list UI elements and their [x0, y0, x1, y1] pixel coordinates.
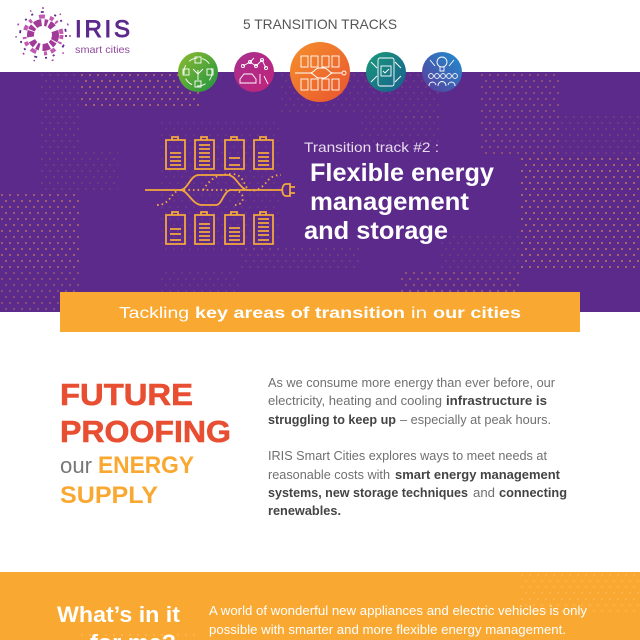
icon: batteries and grid lines [145, 137, 295, 244]
orange banner: our cities [433, 305, 521, 322]
heading: 5 transition tracks: 5 TRANSITION TRACKS [243, 16, 397, 32]
orange banner: in [411, 305, 427, 322]
hero title text [304, 139, 494, 245]
top row of batteries [166, 137, 273, 169]
body text: systems, new storage techniques [268, 486, 468, 500]
body text: IRIS Smart Cities explores ways to meet needs at [268, 449, 548, 463]
body text: connecting [499, 486, 567, 500]
body text: reasonable costs with [268, 468, 390, 482]
logo: IRIS smart cities: IRIS [75, 16, 130, 43]
body text: struggling to keep up [268, 413, 396, 427]
callout question: What’s in it [57, 602, 181, 627]
icon: green track circle [178, 52, 218, 92]
icon: blue track circle [422, 52, 462, 92]
orange banner: key areas of transition [195, 305, 405, 322]
body text: smart energy management [395, 468, 561, 482]
dotted grid lines [157, 174, 281, 205]
headline: future proofing our energy supply: ENERGY [98, 452, 194, 479]
orange banner [60, 292, 580, 332]
plug [280, 184, 295, 196]
body text [268, 376, 567, 518]
hero title text: management [310, 188, 470, 216]
body text: renewables. [268, 504, 341, 518]
hero title text: Transition track #2 : [304, 139, 439, 155]
body text: infrastructure is [446, 394, 547, 408]
headline: future proofing our energy supply: FUTURE [60, 377, 193, 412]
solid grid lines [145, 175, 280, 190]
body text: – especially at peak hours. [400, 413, 551, 427]
headline: future proofing our energy supply: PROOFING [60, 414, 231, 449]
body text: electricity, heating and cooling [268, 394, 442, 408]
icon: magenta track circle [234, 52, 274, 92]
headline: future proofing our energy supply: SUPPLY [60, 482, 158, 509]
body text: As we consume more energy than ever before, our [268, 376, 555, 390]
body text: and [473, 486, 495, 500]
bottom orange panel [0, 572, 640, 640]
hero title text: Flexible energy [310, 159, 494, 187]
hero title text: and storage [304, 217, 448, 245]
headline: future proofing our energy supply: our [60, 453, 92, 478]
headline: future proofing our energy supply [60, 377, 231, 509]
logo: IRIS smart cities: smart cities [75, 44, 130, 56]
callout answer: A world of wonderful new appliances and electric vehicles is only [209, 603, 588, 618]
bottom orange panel: possible with smarter and more flexible energy management. [209, 622, 566, 637]
hero purple background panel [0, 72, 640, 312]
icon: teal track circle [366, 52, 406, 92]
orange banner: Tackling [119, 305, 189, 322]
logo: IRIS smart cities [16, 8, 130, 62]
icon: orange active track circle [290, 42, 350, 102]
bottom row of batteries [166, 212, 273, 244]
